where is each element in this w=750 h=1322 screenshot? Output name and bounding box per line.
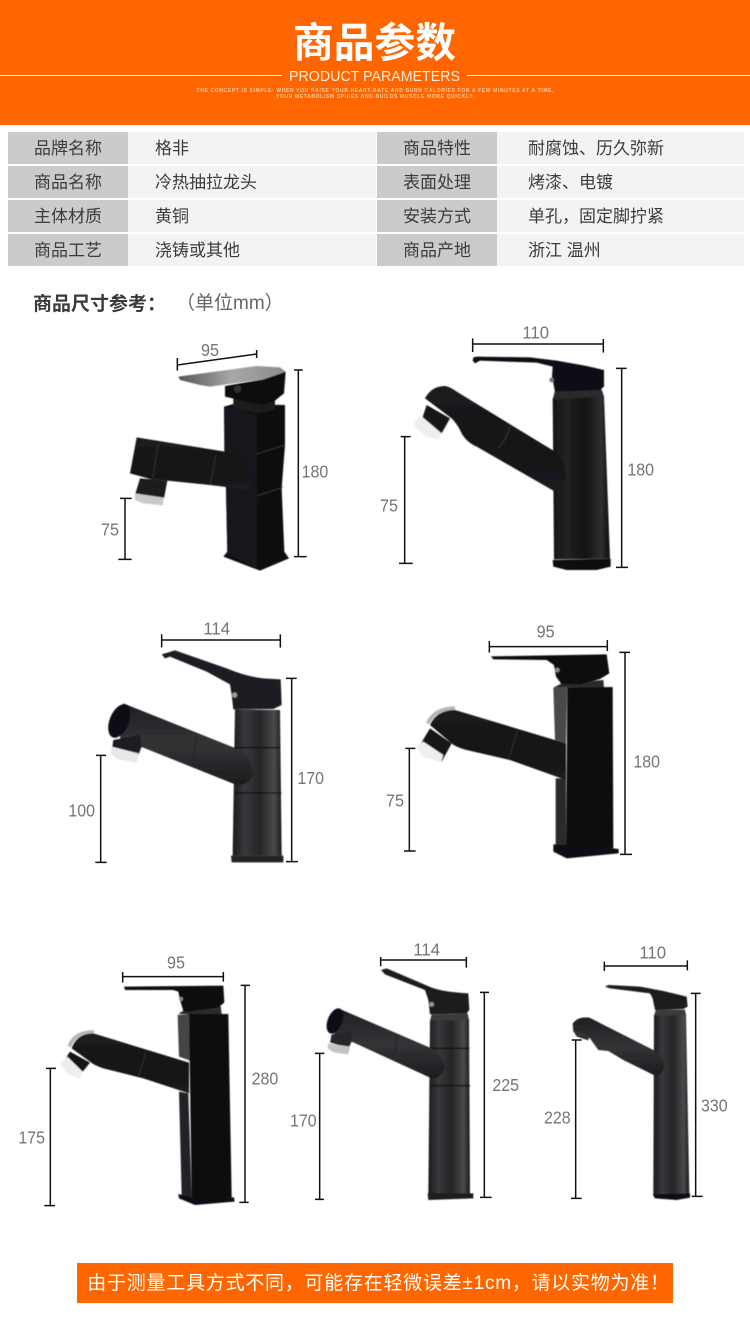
faucet 5 dimensions: 280	[252, 1068, 278, 1088]
tagline: YOUR METABOLISM SPIKES AND BUILDS MUSCLE MORE QUICKLY.	[276, 94, 475, 100]
table row 1: 格非	[155, 139, 189, 158]
table row 4	[8, 234, 744, 266]
table row 3: 黄铜	[155, 207, 189, 226]
faucet 5 dimensions	[18, 952, 278, 1206]
faucet 5 illustration	[60, 986, 235, 1205]
faucet 4 dimensions: 75	[386, 791, 404, 811]
faucet 1 dimensions: 95	[201, 340, 219, 360]
table row 4: 浙江 温州	[528, 241, 601, 260]
faucet 3: round spout with cap	[68, 618, 324, 862]
section heading: size reference	[33, 292, 284, 315]
faucet 7 dimensions: 228	[544, 1107, 571, 1127]
faucet 2 dimensions: 110	[522, 322, 549, 342]
faucet 6 dimensions: 114	[413, 940, 440, 960]
section heading: size reference: 商品尺寸参考：	[33, 294, 166, 315]
table row 3: 安装方式	[403, 207, 471, 226]
faucet 3 dimensions	[68, 618, 324, 862]
faucet 3 dimensions: 114	[203, 618, 230, 638]
tagline	[196, 88, 554, 100]
faucet 3 dimensions: 170	[297, 768, 324, 788]
faucet 6: tall round with cap	[290, 940, 519, 1200]
faucet 7: tallest round	[544, 942, 728, 1200]
table row 2: 冷热抽拉龙头	[155, 173, 257, 192]
table row 1: 耐腐蚀、历久弥新	[528, 139, 664, 158]
tagline: THE CONCEPT IS SIMPLE: WHEN YOU RAISE YOUR HEART-RATE AND BURN CALORIES FOR A FEW MINUTES AT A TIME,	[196, 88, 554, 94]
faucet 7 dimensions: 110	[639, 942, 666, 962]
table row 2: 商品名称	[34, 173, 102, 192]
faucet 6 illustration	[323, 968, 473, 1200]
faucet 7 dimensions: 330	[701, 1096, 728, 1116]
faucet 1 dimensions: 180	[302, 462, 328, 482]
table row 4: 商品产地	[403, 241, 471, 260]
faucet 4 illustration	[416, 654, 619, 858]
faucet 2 dimensions	[380, 322, 654, 567]
table row 4: 商品工艺	[34, 241, 102, 260]
faucet 3 illustration	[104, 650, 283, 862]
table row 1: 品牌名称	[34, 139, 102, 158]
faucet 4 dimensions: 95	[537, 621, 555, 641]
faucet 1: square pull-out	[101, 340, 328, 571]
parameter table	[8, 132, 744, 266]
footer note: 由于测量工具方式不同，可能存在轻微误差±1cm，请以实物为准！	[87, 1273, 670, 1294]
faucet 2 illustration	[414, 357, 611, 570]
faucet 1 dimensions	[101, 340, 328, 559]
table row 1	[8, 132, 744, 164]
table row 3	[8, 200, 744, 232]
faucet 6 dimensions: 170	[290, 1111, 317, 1131]
faucet 6 dimensions	[290, 940, 519, 1199]
header banner	[0, 0, 750, 125]
faucet 7 dimensions	[544, 942, 728, 1198]
faucet 4 dimensions: 180	[633, 752, 660, 772]
faucet 2: round pull-out	[380, 322, 654, 570]
faucet 1 dimensions: 75	[101, 520, 119, 540]
title: 商品参数	[293, 20, 456, 66]
footer note	[77, 1263, 673, 1303]
table row 2	[8, 166, 744, 198]
faucet 5: tall square body	[18, 952, 278, 1206]
faucet 2 dimensions: 180	[627, 460, 654, 480]
table row 1: 商品特性	[403, 139, 471, 158]
faucet 7 illustration	[573, 985, 690, 1200]
table row 4: 浇铸或其他	[155, 241, 240, 260]
faucet 3 dimensions: 100	[68, 801, 95, 821]
faucet 4 dimensions	[386, 621, 660, 854]
faucet 1 illustration	[130, 366, 289, 571]
subtitle: PRODUCT PARAMETERS	[289, 69, 460, 85]
table row 2: 表面处理	[403, 173, 471, 192]
table row 3: 单孔，固定脚拧紧	[528, 207, 664, 226]
table row 2: 烤漆、电镀	[528, 173, 613, 192]
section heading: size reference: （单位mm）	[176, 293, 284, 314]
faucet 5 dimensions: 95	[167, 952, 185, 972]
table row 3: 主体材质	[34, 207, 102, 226]
faucet 2 dimensions: 75	[380, 496, 398, 516]
faucet 4: square body pull-out	[386, 621, 660, 858]
faucet 5 dimensions: 175	[18, 1127, 45, 1147]
faucet 6 dimensions: 225	[492, 1075, 519, 1095]
